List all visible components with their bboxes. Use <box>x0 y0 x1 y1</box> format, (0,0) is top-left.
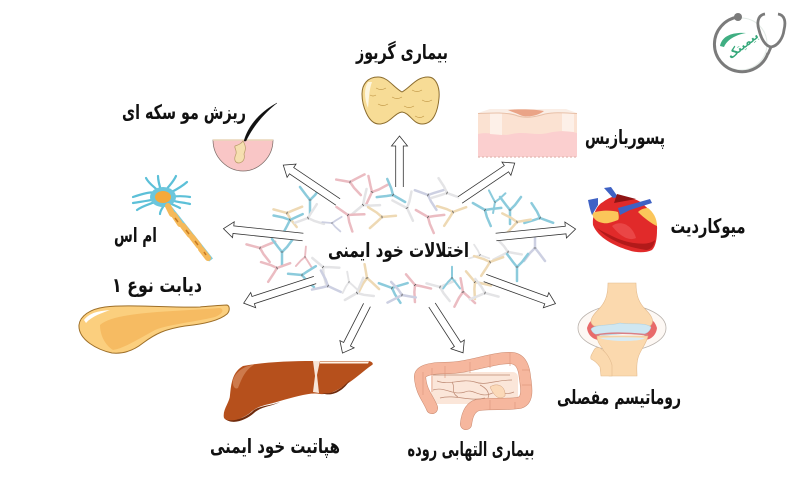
arrow: to pancreas <box>241 272 317 311</box>
icon: heart <box>588 187 657 252</box>
label: alopecia areata: ریزش مو سکه ای <box>122 100 246 124</box>
logo: stethoscope <box>714 13 785 72</box>
label: MS: ام اس <box>114 223 157 247</box>
antibody cluster <box>244 170 557 310</box>
label: myocarditis: میوکاردیت <box>670 214 746 238</box>
icon: pancreas <box>79 305 229 353</box>
label: graves disease: بیماری گریوز <box>355 40 448 64</box>
logo: stethoscope: بیمیتک <box>725 29 761 62</box>
label: type 1 diabetes: دیابت نوع ۱ <box>112 273 202 297</box>
label: autoimmune hepatitis: هپاتیت خود ایمنی <box>210 434 340 459</box>
arrow: to intestine <box>425 301 470 357</box>
label: inflammatory bowel disease: بیماری التهابی روده <box>408 437 534 461</box>
icon: skin section <box>478 109 577 157</box>
arrow: to skin <box>456 156 519 207</box>
label: psoriasis: پسوریازیس <box>585 125 665 150</box>
icon: thyroid <box>362 77 439 124</box>
icon: liver <box>224 361 373 422</box>
label: rheumatoid arthritis: روماتیسم مفصلی <box>557 385 681 409</box>
icon: hair follicle <box>213 103 277 171</box>
arrow: to hair <box>279 158 342 209</box>
arrow: to joint <box>482 270 558 311</box>
icon: knee joint <box>578 283 666 376</box>
icon: intestine <box>420 353 531 424</box>
heading: autoimmune disorders: اختلالات خود ایمنی <box>328 238 469 262</box>
icon: neuron <box>133 176 211 260</box>
arrow: to liver <box>335 301 374 357</box>
arrow: to neuron <box>223 221 304 245</box>
arrow: to thyroid <box>392 136 408 187</box>
arrow: to heart <box>495 221 576 245</box>
